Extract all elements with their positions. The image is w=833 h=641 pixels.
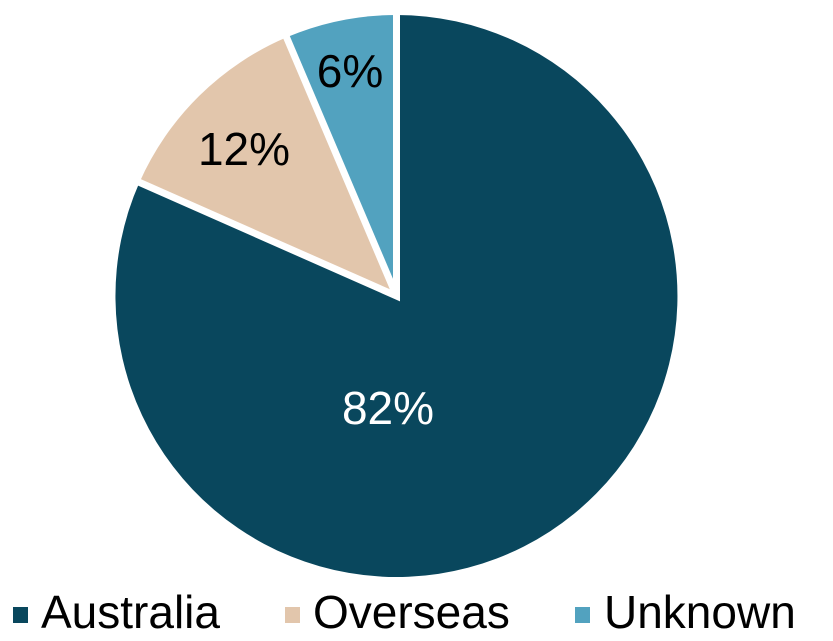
slice: Unknown 6% <box>287 15 396 296</box>
legend <box>13 586 796 638</box>
pie chart <box>115 8 677 577</box>
slice: Australia 82% <box>115 15 677 577</box>
legend item: Overseas: Overseas <box>313 586 510 638</box>
legend item: Australia: Australia <box>41 586 220 638</box>
label: 12%: 12% <box>198 123 290 175</box>
slice: Overseas 12% <box>139 37 396 296</box>
label: 6%: 6% <box>317 45 383 97</box>
legend item: Unknown: Unknown <box>604 586 796 638</box>
label: 82%: 82% <box>342 382 434 434</box>
